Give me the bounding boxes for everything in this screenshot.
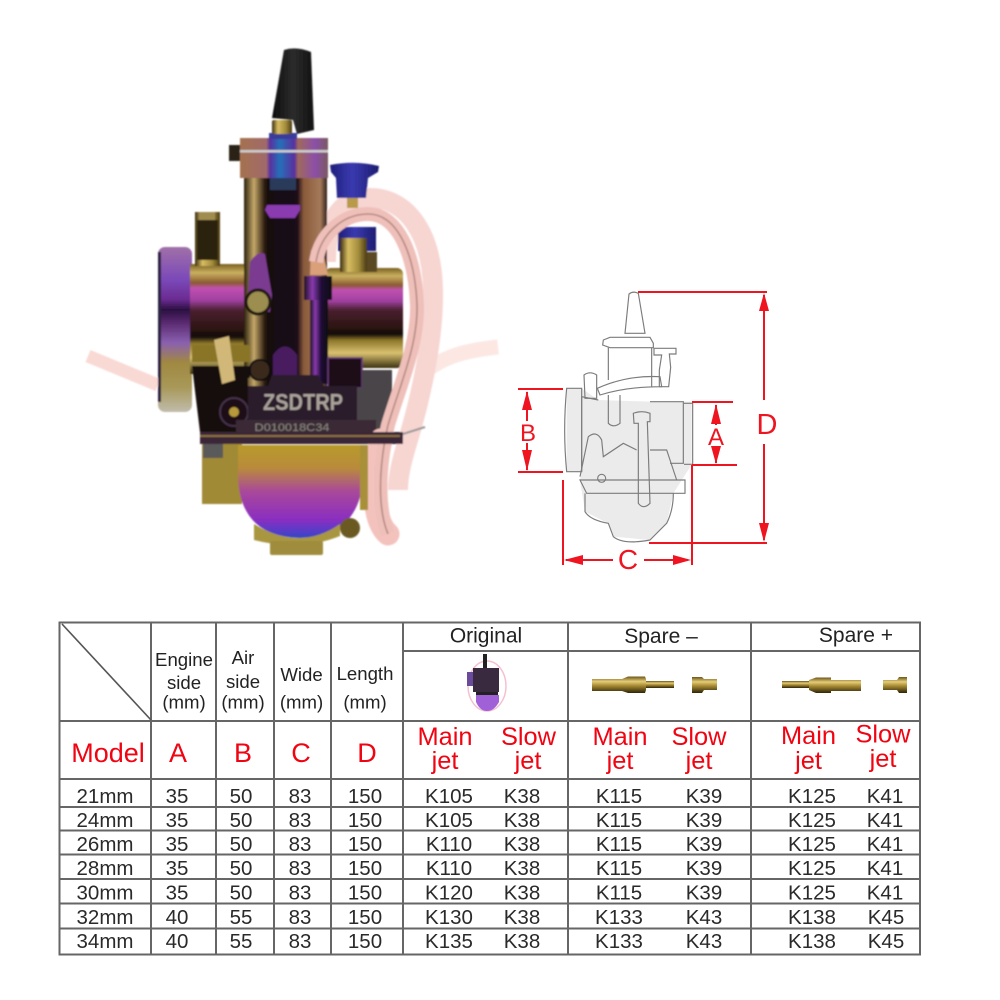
jet labels: Slow [501, 723, 557, 751]
data rows: 150 [348, 809, 382, 832]
round boss and small ring above nameplate [250, 346, 297, 380]
jet labels: jet [794, 747, 822, 775]
data rows: K41 [867, 857, 903, 880]
jet labels: jet [514, 747, 541, 775]
data rows: K130 [425, 906, 473, 929]
retaining plate [200, 432, 403, 444]
data rows: K41 [867, 785, 903, 808]
carburetor photo [88, 48, 498, 555]
data rows: K38 [504, 857, 540, 880]
row labels: Model [71, 738, 145, 768]
data rows: K38 [504, 882, 540, 904]
thumbnail carburetor [467, 654, 506, 711]
centre pipe [304, 276, 332, 300]
main column [244, 178, 327, 388]
right block [328, 358, 362, 388]
data rows: K133 [595, 930, 643, 953]
data rows: 28mm [77, 857, 133, 880]
header: wide [280, 664, 323, 712]
row labels: C [291, 738, 311, 768]
brand text: ZSDTRP [263, 389, 343, 415]
data rows: K38 [504, 906, 540, 929]
data rows: 55 [230, 906, 252, 929]
dimension C [563, 465, 692, 575]
lower ring [254, 524, 340, 545]
dimension C: C [618, 544, 638, 575]
data rows: K138 [788, 906, 836, 929]
data rows: 83 [289, 833, 311, 856]
dimension D [638, 292, 777, 543]
data rows: 21mm [77, 785, 133, 808]
data rows: 50 [230, 809, 252, 832]
header: length [337, 663, 393, 712]
specification table [59, 622, 920, 955]
data rows: 35 [166, 857, 188, 880]
jet labels: jet [869, 745, 896, 773]
data rows: 150 [348, 882, 382, 904]
data rows: 34mm [77, 930, 133, 953]
data rows: K125 [788, 857, 836, 880]
serial number: D010018C34 [254, 422, 330, 434]
data rows: K138 [788, 930, 836, 953]
data rows: 83 [289, 906, 311, 929]
data rows: 150 [348, 906, 382, 929]
header: air side: side [226, 671, 260, 692]
data rows: K45 [868, 906, 904, 929]
corner diagonal [62, 624, 151, 720]
outer clear hose [326, 198, 433, 490]
dimension A [692, 402, 737, 465]
jet labels: jet [685, 747, 712, 775]
spare plus slow jet [883, 677, 907, 693]
data rows: 83 [289, 785, 311, 808]
data rows: K135 [425, 930, 473, 953]
blue choke knob [330, 163, 379, 198]
pale fuel tube left [88, 356, 158, 385]
header: wide: Wide [280, 664, 323, 685]
data rows: 35 [166, 809, 188, 832]
jet cap [220, 398, 248, 426]
left gold block [202, 443, 242, 504]
jet labels: jet [606, 747, 633, 775]
dimension diagram [518, 292, 777, 575]
header: spare plus: Spare + [819, 624, 893, 647]
strip under nameplate [236, 420, 376, 433]
data rows: K43 [686, 930, 722, 953]
right stub with blue behind [338, 227, 376, 251]
pillar left [195, 212, 220, 266]
data rows: K39 [686, 857, 722, 880]
slide cap [229, 145, 241, 161]
data rows: K110 [426, 833, 472, 856]
jet labels [417, 720, 911, 775]
screw boss [247, 253, 272, 312]
black rubber cap [272, 48, 314, 134]
data rows: K125 [788, 809, 836, 832]
header: engine side: side [167, 672, 201, 693]
data rows: 30mm [77, 882, 133, 904]
data rows: K115 [596, 833, 642, 856]
data rows: K38 [504, 833, 540, 856]
data rows: 35 [166, 882, 188, 904]
jet labels: Slow [855, 720, 911, 748]
left body [190, 264, 250, 374]
jet labels: Main [781, 722, 836, 750]
row labels [71, 738, 377, 768]
data rows: 83 [289, 857, 311, 880]
data rows: K39 [686, 785, 722, 808]
spare minus main jet [592, 676, 674, 693]
jet labels: Main [417, 723, 473, 751]
data rows: 50 [230, 857, 252, 880]
data rows: 55 [230, 930, 252, 953]
data rows [77, 785, 904, 953]
data rows: K115 [596, 785, 642, 808]
dark lower left carburetor area [192, 366, 250, 432]
header: air side [221, 647, 265, 712]
data rows: K120 [425, 882, 473, 904]
data rows: K39 [686, 882, 722, 904]
data rows: K43 [686, 906, 722, 929]
inner clear hose [316, 214, 417, 534]
tan vent stub [214, 336, 235, 384]
header: spare minus: Spare – [624, 625, 698, 648]
header: wide: (mm) [280, 692, 323, 712]
data rows: 50 [230, 833, 252, 856]
row labels: D [357, 738, 377, 768]
dimension A: A [708, 424, 724, 451]
header: engine side: (mm) [162, 692, 206, 712]
lower hose loop [375, 440, 388, 534]
header: length: Length [337, 663, 393, 684]
data rows: 150 [348, 930, 382, 953]
data rows: K38 [504, 809, 540, 832]
data rows: K115 [596, 857, 642, 880]
pale fuel tube right [425, 347, 498, 372]
float bowl [238, 445, 363, 538]
header: engine side: Engine [155, 649, 213, 670]
silver nut [272, 120, 292, 134]
data rows: K38 [504, 785, 540, 808]
copper nipple [310, 248, 328, 275]
data rows: K125 [788, 882, 836, 904]
data rows: 150 [348, 833, 382, 856]
dimension D: D [757, 409, 777, 441]
data rows: 50 [230, 785, 252, 808]
grid [59, 622, 920, 955]
data rows: K115 [596, 809, 642, 832]
data rows: 40 [166, 906, 188, 929]
header: air side: Air [232, 647, 254, 668]
data rows: 35 [166, 833, 188, 856]
data rows: K41 [867, 809, 903, 832]
data rows: K105 [425, 785, 473, 808]
spare plus main jet [782, 678, 861, 693]
data rows: K41 [867, 833, 903, 856]
data rows: K45 [868, 930, 904, 953]
jet labels: Slow [671, 723, 727, 751]
data rows: 83 [289, 930, 311, 953]
data rows: K105 [425, 809, 473, 832]
data rows: K41 [867, 882, 903, 904]
dimension B: B [520, 420, 536, 447]
header: length: (mm) [343, 692, 387, 712]
data rows: 40 [166, 930, 188, 953]
header: original: Original [450, 624, 522, 648]
data rows: K110 [426, 857, 472, 880]
header: air side: (mm) [221, 692, 265, 712]
data rows: K133 [595, 906, 643, 929]
row labels: A [169, 738, 187, 768]
data rows: K125 [788, 785, 836, 808]
drain nut [270, 541, 323, 555]
right body [325, 268, 403, 368]
dimension B [518, 389, 563, 472]
data rows: 35 [166, 785, 188, 808]
data rows: 50 [230, 882, 252, 904]
carburetor sketch [565, 292, 693, 542]
data rows: 150 [348, 857, 382, 880]
data rows: K39 [686, 809, 722, 832]
data rows: 26mm [77, 833, 133, 856]
data rows: 32mm [77, 906, 133, 929]
header: engine side [155, 649, 213, 712]
data rows: K39 [686, 833, 722, 856]
data rows: 83 [289, 809, 311, 832]
jet labels: jet [431, 747, 458, 775]
nameplate [248, 375, 357, 420]
air duct left flange [158, 247, 192, 412]
data rows: 83 [289, 882, 311, 904]
data rows: K115 [596, 882, 642, 904]
row labels: B [234, 738, 252, 768]
jet labels: Main [592, 723, 648, 751]
spare minus slow jet [692, 677, 717, 693]
data rows: K38 [504, 930, 540, 953]
data rows: K125 [788, 833, 836, 856]
data rows: 150 [348, 785, 382, 808]
data rows: 24mm [77, 809, 133, 832]
